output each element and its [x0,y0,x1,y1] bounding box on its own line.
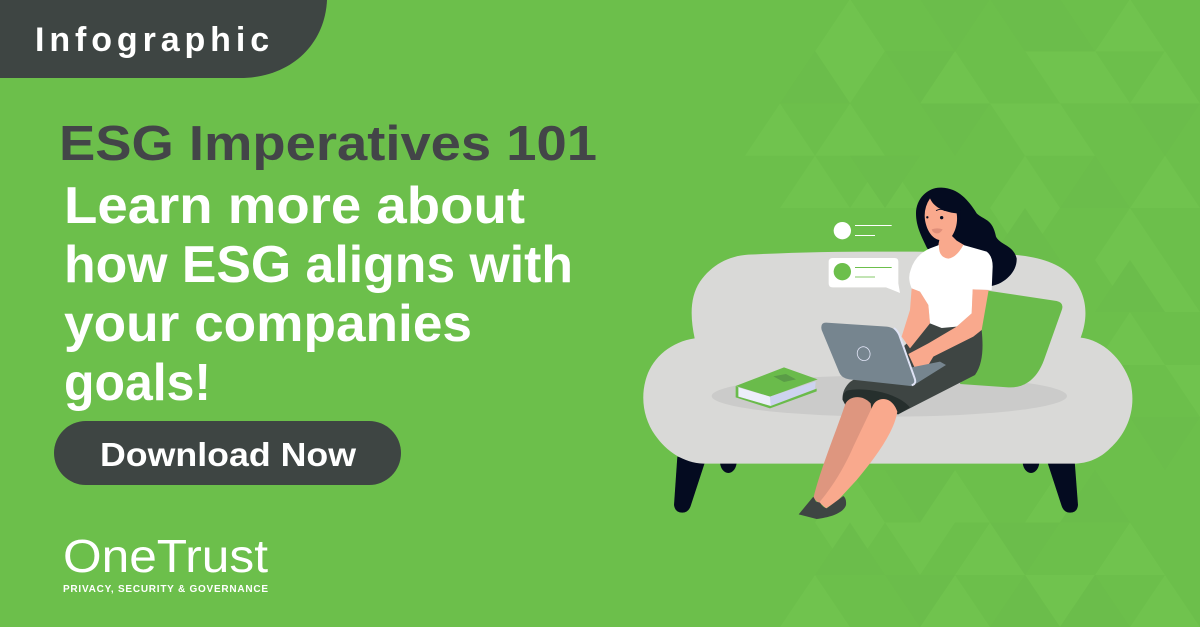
message: white circle and lines [834,222,892,239]
subheading: learn more text block: your companies [64,295,472,353]
front leg [819,399,897,508]
seat shadow [712,375,1067,417]
subheading: learn more text block: how ESG aligns with [64,236,573,294]
book [736,367,818,408]
logo: OneTrust: OneTrust [63,530,268,582]
message: speech bubble [829,258,900,293]
background: triangle pattern [745,0,1200,627]
eyes and mouth [926,209,945,233]
back leg [813,397,872,504]
hair [916,188,1017,286]
tab: Infographic label [0,0,327,78]
logo: OneTrust: PRIVACY, SECURITY & GOVERNANCE [63,584,268,595]
skirt shadow [843,389,910,414]
title: ESG Imperatives 101: ESG Imperatives 101 [59,117,597,171]
hair strand [958,209,961,221]
pillow [960,290,1062,387]
skirt [843,323,983,413]
face and neck [925,198,964,259]
laptop lid [821,323,915,386]
shoe [799,496,846,519]
subheading: learn more text block: Learn more about [64,177,525,235]
illustration: woman on sofa with laptop [643,188,1132,519]
sofa legs [674,457,1078,513]
shirt [909,245,993,328]
button: Download Now: Download Now [100,436,356,473]
subheading: learn more text block [64,177,573,412]
laptop base [907,362,946,383]
laptop logo [855,345,872,362]
sofa body [643,252,1132,464]
laptop edge [894,328,915,385]
button: Download Now [54,421,401,485]
tab: Infographic label: Infographic [35,21,274,59]
subheading: learn more text block: goals! [64,354,211,412]
arms [902,288,989,368]
